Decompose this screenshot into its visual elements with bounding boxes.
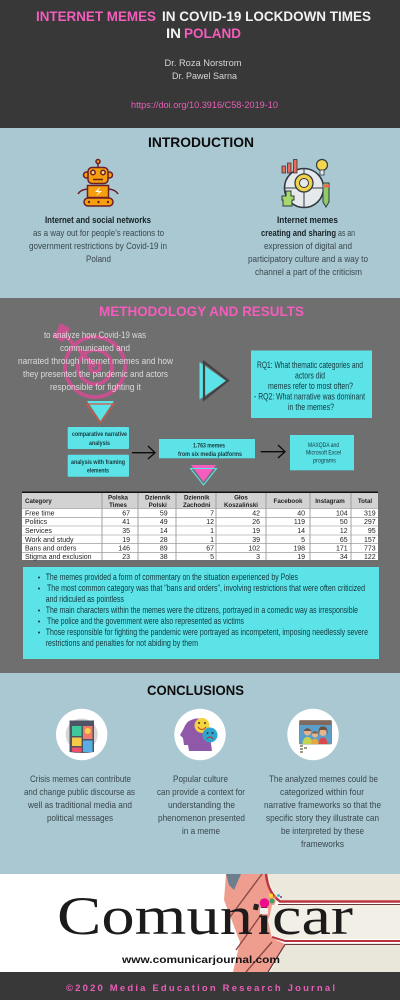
text block: internet memes: expression of digital and <box>264 241 352 252</box>
table row: work and study: 5 <box>301 537 305 544</box>
aim text: communicated and <box>60 343 130 354</box>
table row: bans and orders: Bans and orders <box>25 546 77 552</box>
aim text: narrated through Internet memes and how <box>18 356 173 367</box>
box: software programs: programs <box>313 458 336 464</box>
text block: internet memes: participatory culture and a way to <box>248 254 368 265</box>
table row: politics: 50 <box>340 519 348 526</box>
research questions box: RQ1: What thematic categories and <box>257 360 363 370</box>
authors: Dr. Roza Norstrom <box>164 58 242 69</box>
table row: work and study: 65 <box>340 537 348 544</box>
copyright line: ©2020 Media Education Research Journal <box>66 983 335 994</box>
table row: work and study: 19 <box>122 537 130 544</box>
box: comparative narrative analysis: analysis <box>89 440 110 447</box>
box: comparative narrative analysis: comparative narrative <box>72 431 127 438</box>
table row: work and study: 39 <box>252 537 260 544</box>
table row: work and study: 1 <box>210 537 214 544</box>
table row: stigma and exclusion: 34 <box>340 554 348 561</box>
image: stack of books <box>224 874 400 972</box>
table row: services: 14 <box>297 528 305 535</box>
aim text: they presented the pandemic and actors <box>23 369 168 380</box>
table row: services <box>25 528 376 535</box>
arrow: to software box <box>261 445 285 458</box>
box: analysis with framing elements <box>68 455 129 477</box>
research questions box: - RQ2: What narrative was dominant <box>254 392 365 402</box>
aim text: responsible for fighting it <box>50 382 141 393</box>
table row: politics: 119 <box>294 519 305 526</box>
panel: journal logo banner <box>0 874 400 972</box>
text block: internet and social networks: government restrictions by Covid-19 in <box>29 241 167 252</box>
table row: services: 14 <box>160 528 168 535</box>
panel: footer <box>0 972 400 1000</box>
table row: stigma and exclusion: 38 <box>160 554 168 561</box>
icon: target with arrow <box>52 323 125 397</box>
box: analysis with framing elements: analysis with framing <box>71 459 125 466</box>
box: software programs: Microsoft Excel <box>306 450 341 456</box>
results bullet panel: and ridiculed as pointless <box>46 594 124 604</box>
authors: Dr. Pawel Sarna <box>172 71 238 82</box>
text block: internet memes <box>248 215 368 278</box>
logo: Comunicar: car <box>272 886 353 946</box>
results bullet panel: The memes provided a form of commentary on the situation experienced by Poles <box>46 572 298 582</box>
table header: Instagram <box>315 498 345 505</box>
table header: Koszaliński <box>224 502 258 509</box>
box: 1.763 memes: from six media platforms <box>178 451 242 458</box>
table row: stigma and exclusion: 3 <box>256 554 260 561</box>
text block: narrative frameworks: categorized within four <box>280 787 364 798</box>
introduction heading: INTRODUCTION <box>148 134 254 150</box>
table row: services: 19 <box>252 528 260 535</box>
icon: tablet with tiles <box>56 709 107 760</box>
icon: family in a window <box>287 709 339 760</box>
box: software programs <box>290 435 354 470</box>
text block: narrative frameworks <box>264 774 381 850</box>
table header: Dziennik <box>145 494 171 502</box>
research questions box <box>251 350 372 418</box>
arrow: down triangle cyan <box>86 401 114 422</box>
table row: politics: 49 <box>160 519 168 526</box>
conclusions heading: CONCLUSIONS <box>147 682 244 698</box>
text block: internet memes: channel a part of the criticism <box>255 267 362 278</box>
arrow: down triangle pink <box>190 465 216 485</box>
table header: Facebook <box>274 498 303 505</box>
table row: stigma and exclusion <box>25 554 376 561</box>
text block: popular culture: Popular culture <box>173 774 228 785</box>
panel: header <box>0 0 400 128</box>
authors <box>164 58 242 82</box>
table header: Zachodni <box>183 502 211 509</box>
table row: free time: 319 <box>364 510 376 518</box>
text block: narrative frameworks: The analyzed memes could be <box>269 774 378 785</box>
icon: robot <box>78 160 118 206</box>
table header: Times <box>109 502 127 509</box>
title: POLAND <box>184 26 241 41</box>
text block: narrative frameworks: specific story they illustrate can <box>266 813 379 824</box>
results bullet panel <box>23 567 379 659</box>
text block: internet memes: creating and sharing <box>261 228 336 239</box>
text block: crisis memes: and change public discourse as <box>24 787 135 798</box>
logo: Comunicar: Comun <box>57 886 253 946</box>
text block: crisis memes: political messages <box>47 813 113 824</box>
results bullet panel: The police and the government were also represented as victims <box>47 616 244 626</box>
panel: conclusions <box>0 673 400 874</box>
text block: popular culture: phenomenon presented <box>158 813 245 824</box>
table row: bans and orders: 146 <box>118 546 130 552</box>
table header: Total <box>358 498 372 505</box>
table row: bans and orders: 102 <box>248 546 260 552</box>
box: 1.763 memes <box>159 439 255 458</box>
panel: methodology and results <box>0 298 400 673</box>
box: 1.763 memes: 1.763 memes <box>193 442 225 450</box>
doi link: https://doi.org/10.3916/C58-2019-10 <box>131 100 278 111</box>
text block: internet memes: Internet memes <box>277 215 338 226</box>
text block: internet and social networks: as a way out for people's reactions to <box>33 228 164 239</box>
table row: bans and orders: 198 <box>293 546 305 552</box>
research questions box: memes refer to most often? <box>268 381 353 391</box>
table row: work and study: 157 <box>364 537 376 544</box>
text block: narrative frameworks: frameworks <box>301 839 344 850</box>
arrow: to memes box <box>132 446 155 459</box>
research questions box: in the memes? <box>288 402 334 412</box>
title <box>36 9 371 41</box>
journal website: www.comunicarjournal.com <box>121 954 280 966</box>
title: IN COVID-19 LOCKDOWN TIMES <box>162 9 371 24</box>
text block: narrative frameworks: be interpreted by these <box>281 826 364 837</box>
title: IN <box>166 26 181 41</box>
research questions box: actors did <box>295 370 325 380</box>
text block: internet and social networks <box>29 215 167 265</box>
text block: internet memes: as an <box>338 228 355 239</box>
table row: bans and orders: 171 <box>336 546 348 552</box>
table row: free time: Free time <box>25 510 55 518</box>
table row: free time: 40 <box>297 510 305 518</box>
table row: services: 1 <box>210 528 214 535</box>
table row: work and study: Work and study <box>25 537 74 544</box>
table row: services: Services <box>25 528 52 535</box>
table row: services: 35 <box>122 528 130 535</box>
aim text: to analyze how Covid-19 was <box>44 330 146 341</box>
aim text <box>18 330 173 393</box>
box: analysis with framing elements: elements <box>87 468 109 474</box>
table row: bans and orders: 67 <box>206 546 214 552</box>
table row: stigma and exclusion: 19 <box>297 554 305 561</box>
table row: politics <box>25 519 376 526</box>
table header: Polski <box>149 502 167 509</box>
table row: free time: 104 <box>336 510 348 518</box>
text block: internet and social networks: Poland <box>86 254 111 265</box>
table row: bans and orders <box>25 546 376 552</box>
table row: politics: 12 <box>206 519 214 526</box>
table row: politics: 297 <box>364 519 376 526</box>
box: comparative narrative analysis <box>68 427 129 449</box>
text block: popular culture: can provide a context for <box>157 787 245 798</box>
table row: free time: 7 <box>210 510 214 518</box>
table header: Category <box>25 498 52 505</box>
table header: Głos <box>234 494 248 502</box>
text block: crisis memes: Crisis memes can contribute <box>30 774 131 785</box>
text block: popular culture <box>157 774 245 837</box>
icon: digital culture gear <box>282 160 329 208</box>
table row: services: 12 <box>340 528 348 535</box>
logo: Comunicar: i <box>258 898 270 943</box>
text block: crisis memes: well as traditional media and <box>27 800 132 811</box>
table row: stigma and exclusion: 122 <box>364 554 376 561</box>
table row: bans and orders: 773 <box>364 546 376 552</box>
title: INTERNET MEMES <box>36 9 156 24</box>
table row: stigma and exclusion: Stigma and exclusion <box>25 554 92 561</box>
icon: head with emotions <box>174 709 226 760</box>
table header <box>25 494 372 509</box>
table row: politics: Politics <box>25 519 48 526</box>
text block: crisis memes <box>24 774 135 824</box>
arrow: right triangle <box>200 362 228 400</box>
text block: internet and social networks: Internet and social networks <box>45 215 151 226</box>
table: memes by category and platform <box>22 492 378 561</box>
table row: free time: 42 <box>252 510 260 518</box>
table row: services: 95 <box>368 528 376 535</box>
table header: Polska <box>108 494 129 502</box>
text block: popular culture: in a meme <box>182 826 220 837</box>
table row: bans and orders: 89 <box>160 546 168 552</box>
table row: free time: 59 <box>160 510 168 518</box>
table header: Dziennik <box>184 494 210 502</box>
logo: Comunicar <box>57 886 353 946</box>
panel: introduction <box>0 128 400 298</box>
table row: free time <box>25 510 376 518</box>
results bullet panel: restrictions and penalties for not abiding by them <box>46 638 198 648</box>
text block: popular culture: understanding the <box>168 800 235 811</box>
box: software programs: MAXQDA and <box>308 442 339 449</box>
table row: stigma and exclusion: 5 <box>210 554 214 561</box>
table row: politics: 41 <box>122 519 130 526</box>
table row: work and study: 28 <box>160 537 168 544</box>
methodology heading: METHODOLOGY AND RESULTS <box>99 303 304 319</box>
table row: free time: 67 <box>122 510 130 518</box>
table row: politics: 26 <box>252 519 260 526</box>
table row: stigma and exclusion: 23 <box>122 554 130 561</box>
table row: work and study <box>25 537 376 544</box>
text block: narrative frameworks: narrative frameworks so that the <box>264 800 381 811</box>
